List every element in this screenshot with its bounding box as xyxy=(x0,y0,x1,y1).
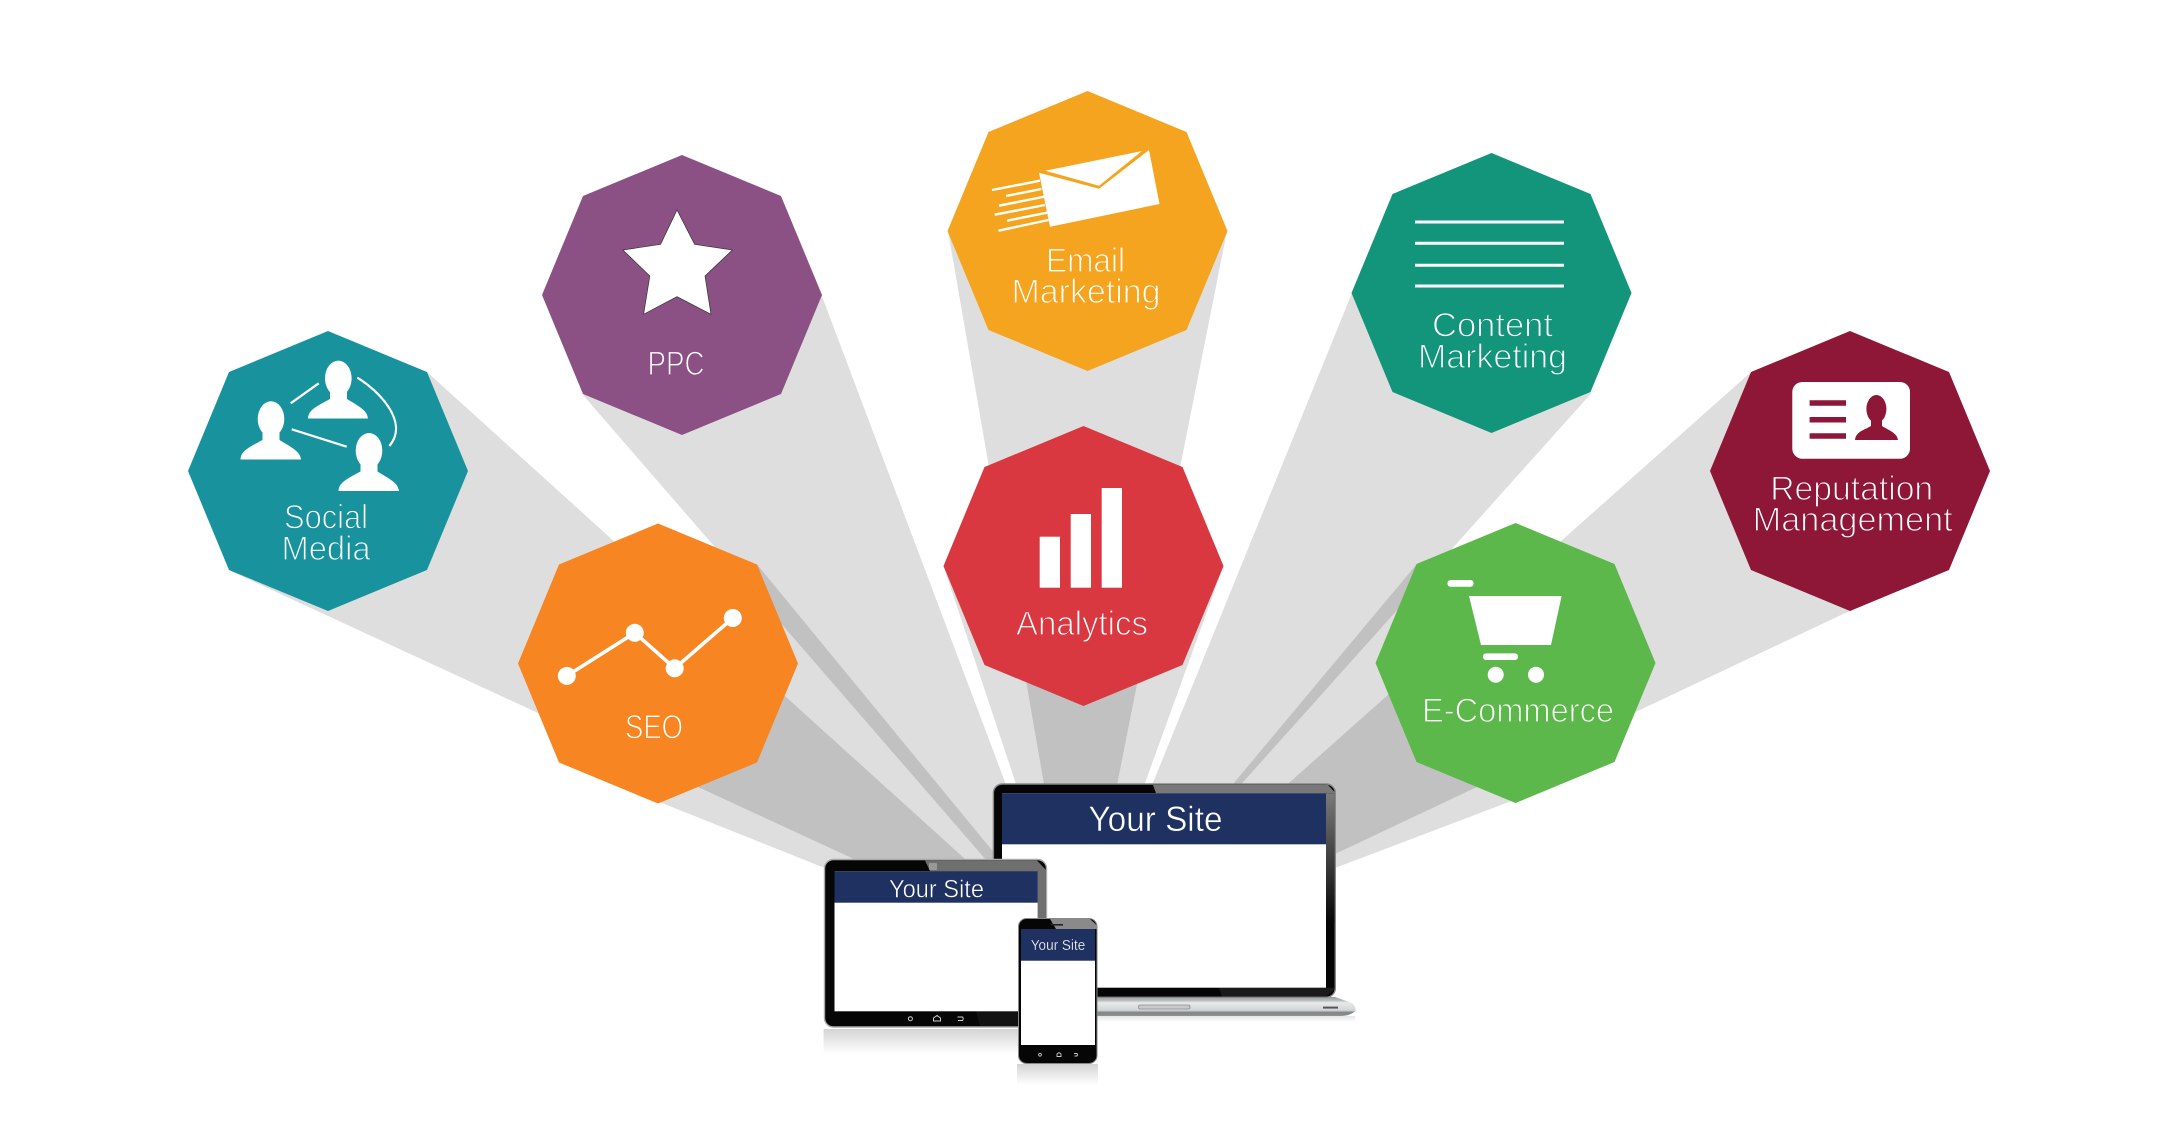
label: content marketing: Content xyxy=(1432,306,1554,344)
label: reputation management xyxy=(1753,470,1953,539)
label: email marketing: Marketing xyxy=(1012,273,1160,311)
label: analytics: Analytics xyxy=(1016,605,1148,643)
label: reputation management: Management xyxy=(1753,501,1953,539)
icon: text lines xyxy=(1415,222,1564,286)
panel: reputation management xyxy=(1710,331,1990,611)
panel: social media xyxy=(188,331,468,611)
device: phone xyxy=(1017,918,1098,1085)
phone site header xyxy=(1021,929,1095,961)
icon: id card xyxy=(1792,382,1910,459)
device: tablet xyxy=(824,860,1046,1054)
label: social media xyxy=(282,498,371,568)
phone site header: Your Site xyxy=(1031,938,1085,954)
tablet nav buttons xyxy=(908,1016,963,1021)
panel: email marketing xyxy=(948,91,1228,371)
label: social media: Social xyxy=(284,498,368,536)
phone nav buttons xyxy=(1039,1052,1078,1056)
panel: seo xyxy=(518,524,798,804)
label: email marketing: Email xyxy=(1046,242,1125,280)
panel: content marketing xyxy=(1352,153,1632,433)
laptop site header: Your Site xyxy=(1088,800,1222,839)
icon: shopping cart xyxy=(1448,580,1562,683)
panel: analytics xyxy=(944,426,1224,706)
label: e-commerce: E-Commerce xyxy=(1422,692,1614,730)
icon: bar chart xyxy=(1040,488,1122,588)
label: ppc: PPC xyxy=(648,345,704,383)
light beams from services to devices xyxy=(228,231,1850,898)
laptop site header xyxy=(1002,793,1326,844)
device: laptop xyxy=(993,784,1356,1022)
icon: line chart xyxy=(558,609,742,685)
label: seo: SEO xyxy=(625,708,683,746)
panel: e-commerce xyxy=(1376,523,1656,803)
icon: star xyxy=(623,210,732,314)
panel: ppc xyxy=(542,155,822,435)
icon: envelope with speed lines xyxy=(992,150,1160,231)
tablet site header: Your Site xyxy=(889,875,984,903)
label: social media: Media xyxy=(282,530,371,568)
label: content marketing xyxy=(1418,306,1567,376)
label: content marketing: Marketing xyxy=(1418,338,1567,376)
icon: social network people xyxy=(240,361,399,491)
tablet site header xyxy=(834,871,1038,903)
label: reputation management: Reputation xyxy=(1770,470,1933,508)
label: email marketing xyxy=(1012,242,1160,311)
